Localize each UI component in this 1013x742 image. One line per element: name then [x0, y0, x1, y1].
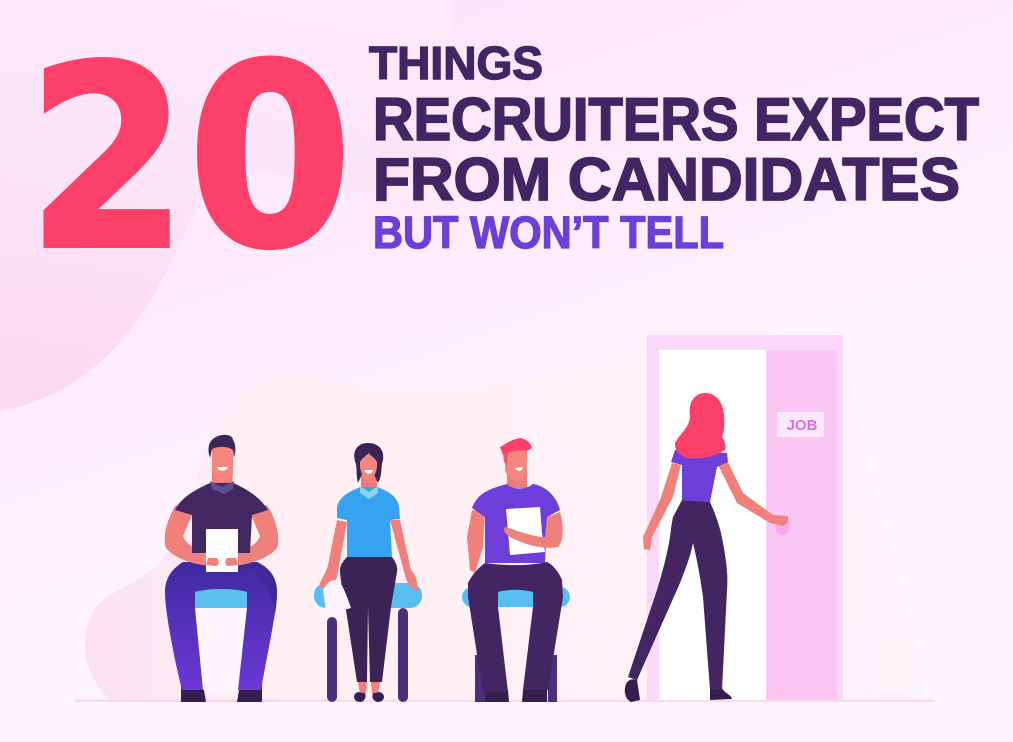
shoes [181, 680, 262, 702]
title line: RECRUITERS EXPECT: RECRUITERS EXPECT [373, 86, 979, 153]
trousers [165, 562, 277, 690]
head [212, 447, 233, 481]
hair and face [354, 443, 383, 483]
top [671, 450, 728, 502]
left arm [467, 510, 485, 573]
chair seat [462, 587, 570, 607]
person: seated man with dark shirt [165, 435, 278, 702]
chair seat [195, 589, 247, 608]
legs and shoes [358, 682, 380, 694]
head [505, 448, 527, 481]
shirt [175, 483, 268, 553]
title [369, 37, 979, 258]
arms [165, 505, 216, 566]
shoes [485, 690, 547, 702]
shirt [337, 487, 400, 557]
ground line [75, 700, 935, 702]
hair [675, 393, 726, 459]
left arm [643, 463, 681, 550]
chair legs [475, 655, 485, 702]
person: seated man with purple shirt [462, 438, 570, 702]
title line: FROM CANDIDATES: FROM CANDIDATES [373, 146, 960, 213]
person: seated woman with blue shirt [314, 443, 422, 702]
trousers [628, 500, 727, 690]
right arm [718, 462, 788, 526]
neck [361, 474, 377, 490]
title line: THINGS: THINGS [369, 37, 543, 89]
trousers [340, 557, 397, 682]
door sign: JOB [777, 412, 824, 437]
title line: BUT WON'T TELL: BUT WON’T TELL [373, 207, 724, 258]
neck [212, 470, 233, 487]
big number 20 [27, 12, 352, 306]
chair seat [314, 583, 422, 608]
door [647, 335, 843, 700]
digit 0: 0 [188, 12, 352, 304]
trousers [468, 562, 563, 692]
arms [319, 520, 347, 590]
paper [506, 507, 545, 555]
door sign: JOB: JOB [787, 417, 818, 434]
cloth [323, 580, 351, 618]
neck [507, 468, 527, 488]
shoes [625, 679, 640, 702]
person: woman walking through door [625, 393, 788, 702]
chair legs [327, 617, 337, 702]
shirt [472, 484, 560, 563]
right arm [504, 512, 563, 548]
digit 2: 2 [27, 13, 188, 306]
paper [206, 529, 238, 572]
door handle [776, 520, 789, 535]
